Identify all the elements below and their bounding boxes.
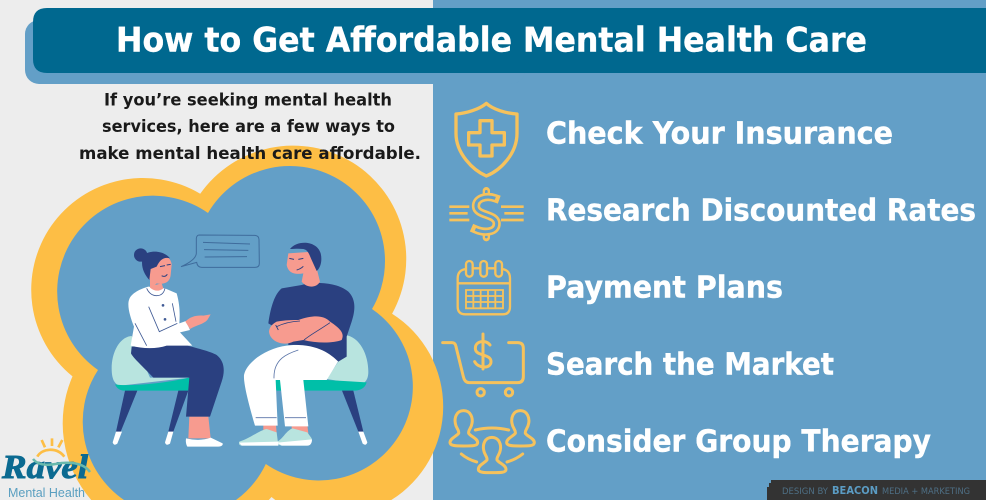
item: check your insurance: Check Your Insurance [546, 116, 893, 152]
cloud: blue fill [57, 166, 413, 500]
chair: man [270, 335, 368, 445]
logo sun [37, 438, 64, 457]
speech bubble [181, 235, 259, 267]
icon: shield with cross [456, 103, 517, 176]
intro text: services, here are a few ways to [102, 117, 395, 137]
panel: right blue background [433, 0, 986, 500]
icon: group of people [450, 411, 534, 473]
list items [546, 116, 976, 460]
logo swoosh [33, 459, 90, 472]
title: How to Get Affordable Mental Health Care [116, 20, 867, 60]
intro text: If you’re seeking mental health [104, 90, 392, 110]
intro text [79, 90, 421, 164]
footer credit: MEDIA + MARKETING [882, 487, 970, 497]
illustration cloud background [31, 146, 443, 500]
chair: woman [112, 336, 190, 445]
header shadow [25, 20, 525, 84]
illustration: two people talking [112, 235, 368, 447]
footer credit: DESIGN BY [782, 487, 828, 497]
woman [128, 248, 224, 447]
icon: shopping cart with dollar [443, 334, 523, 396]
logo wordmark: Ravel [1, 449, 89, 486]
intro text: make mental health care affordable. [79, 144, 421, 164]
logo subtitle: Mental Health [8, 486, 85, 500]
item: search the market: Search the Market [546, 348, 834, 382]
footer credit [767, 480, 986, 500]
footer credit: BEACON [832, 485, 878, 497]
cloud: yellow outline [31, 146, 443, 500]
icon: calendar [458, 261, 510, 314]
icon: dollar sign with lines [449, 191, 524, 238]
item: payment plans: Payment Plans [546, 270, 783, 306]
header bar [33, 8, 986, 73]
man [239, 243, 354, 446]
item: consider group therapy: Consider Group Therapy [546, 424, 931, 460]
logo: Ravel Mental Health [1, 438, 90, 500]
